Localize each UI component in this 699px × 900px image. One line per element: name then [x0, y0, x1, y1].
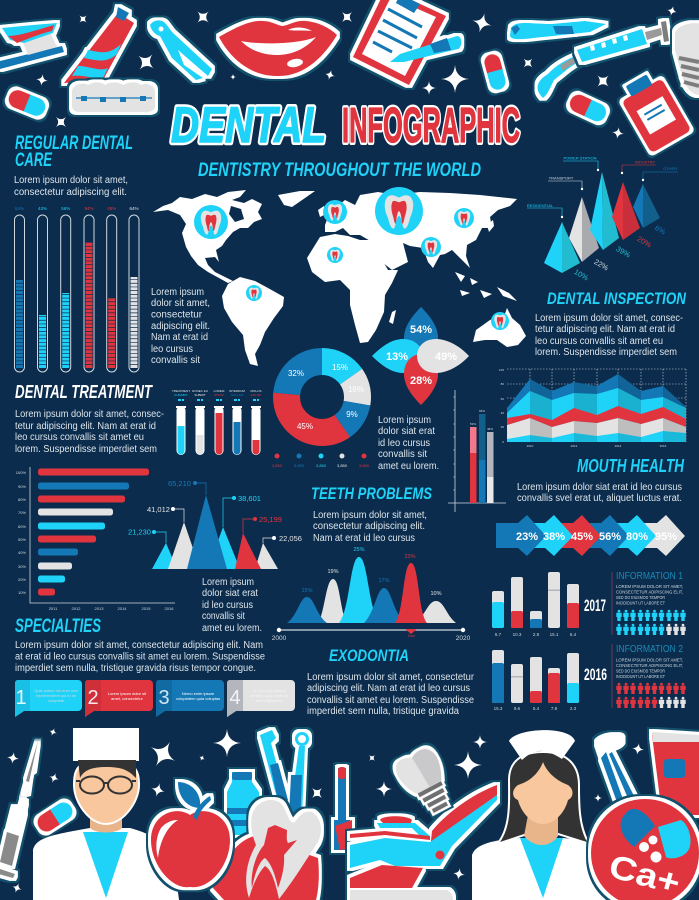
test tubes: INTERDUM — [229, 389, 245, 393]
face — [513, 762, 573, 824]
text block: world map: consectetur — [151, 310, 203, 320]
arrow percentages: 23% — [516, 531, 538, 543]
horizontal bar chart: 20% — [18, 577, 26, 582]
bell curve chart — [272, 547, 471, 642]
text block: dental inspection: tetur adipiscing elit. Nam at erat id — [535, 324, 675, 335]
donut chart: 32% — [288, 369, 304, 378]
text block: lorem. Suspendisse imperdiet sem — [15, 444, 157, 455]
text block: Lorem ipsum dolor sit amet, consectetur adipiscing elit. Nam — [15, 640, 263, 651]
horizontal bar chart: 2016 — [165, 606, 174, 611]
icon: dental implant — [675, 23, 699, 95]
arrow percentages — [496, 515, 685, 556]
card 1: voluptate — [48, 698, 65, 703]
icon: implant bottom — [392, 744, 458, 818]
tube bar chart: 45% — [107, 206, 116, 211]
text block: world map: dolor sit amet, — [151, 298, 210, 309]
scrubs — [520, 838, 563, 898]
icon: syringe bottom left — [0, 741, 38, 878]
text block — [313, 510, 427, 544]
horizontal bar chart: 40% — [18, 550, 26, 555]
petal chart: 13% — [386, 351, 408, 363]
icon: capsule pill top centre — [483, 53, 507, 91]
heading — [15, 133, 133, 171]
test tubes: LOREM — [214, 389, 225, 393]
text block: world map: Nam at erat id — [151, 332, 208, 343]
donut legend — [272, 454, 370, 468]
panel: pyramid chart — [527, 156, 678, 283]
text block: tetur adipiscing elit. Nam at erat id — [15, 421, 156, 432]
heading: CARE — [15, 150, 53, 171]
icon: dental chair — [350, 785, 497, 900]
tube bar chart: 94% — [84, 206, 94, 211]
donut chart — [286, 362, 364, 432]
tube bar chart — [14, 206, 139, 372]
neck — [90, 810, 122, 832]
doctor figure — [33, 728, 179, 900]
icon: calcium pill circle: Ca+ — [605, 847, 684, 900]
horizontal bar chart: 10% — [18, 590, 26, 595]
information 2: LOREM IPSUM DOLOR SIT AMET, — [616, 658, 683, 662]
neck — [524, 815, 558, 845]
hair — [500, 753, 587, 842]
horizontal bar chart: 50% — [18, 537, 26, 542]
panel: regular dental care — [14, 133, 139, 372]
glasses — [76, 776, 136, 794]
bar chart 2016: 2.3 — [570, 706, 577, 711]
bell curve chart: 2020 — [456, 635, 471, 642]
text block — [14, 175, 128, 198]
text block: mountain chart: convallis sit — [202, 611, 245, 622]
bar chart 2017: 6.4 — [570, 632, 577, 637]
card 4: Ut enim ad minima — [252, 688, 286, 693]
text block: Lorem ipsum dolor siat erat id leo cursus — [517, 482, 682, 493]
information 1 — [612, 571, 686, 635]
panel: dental treatment — [15, 382, 262, 455]
bar chart 2016 — [492, 650, 607, 711]
information 2 — [612, 644, 686, 708]
text block: mountain chart: Lorem ipsum — [202, 577, 254, 588]
horizontal bar chart: 30% — [18, 564, 26, 569]
coat — [472, 838, 613, 900]
title word: dental fill weight: DENTAL — [171, 97, 326, 153]
donut legend: 3,850 — [294, 463, 305, 468]
horizontal bar chart: 2012 — [72, 606, 81, 611]
text block: dental inspection: leo cursus convallis sit amet eu — [535, 336, 663, 347]
arrow percentages: 95% — [655, 531, 677, 543]
text block: convallis sit amet eu lorem. Suspendisse — [307, 695, 474, 706]
mountain chart — [128, 479, 302, 569]
donut legend: 3,850 — [359, 463, 370, 468]
mountain chart: 22,056 — [279, 534, 302, 543]
vertical bar chart: 68% — [479, 409, 485, 413]
petal chart: 54% — [410, 324, 432, 336]
heading: REGULAR DENTAL — [15, 133, 133, 154]
information 2: SED DO EIUSMOD TEMPOR — [616, 668, 665, 674]
text block: leo cursus convallis sit amet eu — [15, 432, 144, 443]
bell curve chart: 25% — [353, 547, 365, 553]
text block: world map: convallis sit — [151, 355, 200, 366]
petal chart: 49% — [435, 351, 457, 363]
text block: donut: amet eu lorem. — [378, 461, 439, 472]
area chart: 2012 — [571, 444, 578, 448]
text block: donut: Lorem ipsum — [378, 415, 431, 426]
area chart — [499, 368, 686, 448]
mountain chart: 21,230 — [128, 528, 151, 536]
icon: capsule pill bottom left — [34, 799, 76, 835]
coat — [33, 828, 179, 900]
horizontal bar chart: 2014 — [118, 606, 127, 611]
text block: at erat id leo cursus convallis sit amet eu lorem. Suspendisse — [15, 652, 265, 662]
horizontal bar chart: 2013 — [95, 606, 104, 611]
text block: world map: adipiscing elit. — [151, 321, 210, 332]
hat — [73, 728, 139, 761]
text block: convallis svel erat ut, aliquet luctus erat. — [517, 493, 682, 504]
bar chart 2016: 2016 — [584, 665, 607, 684]
donut legend: 3,850 — [316, 463, 327, 468]
horizontal bar chart: 70% — [18, 510, 26, 515]
card 4: 4 — [229, 687, 241, 709]
information 1: LOREM IPSUM DOLOR SIT AMET, — [616, 584, 683, 589]
information 2: CONSECTETUR ADIPISCING ELIT, — [616, 663, 683, 668]
title word: infographic: INFOGRAPHIC — [342, 99, 520, 153]
icon: capsule pill left — [6, 88, 48, 118]
text block: donut — [378, 415, 439, 472]
text block: dental inspection — [535, 313, 683, 358]
test tubes: TREATMENT — [172, 389, 190, 393]
icon: medicine bottle — [616, 69, 691, 153]
arrow percentages: 80% — [626, 531, 648, 543]
text block — [307, 672, 475, 717]
text block: consectetur adipiscing elit. — [14, 187, 127, 198]
card 3 — [156, 680, 224, 717]
information 1: INFORMATION 1 — [616, 571, 683, 582]
text block: mountain chart: dolor siat erat — [202, 588, 258, 599]
bar chart 2016: 7.8 — [551, 706, 558, 711]
icon: calcium pill circle — [591, 799, 699, 900]
panel: pyramid chart: 39% — [614, 244, 632, 260]
horizontal bar chart: 60% — [18, 524, 26, 529]
bell curve chart: Total — [407, 634, 415, 638]
card 2: 2 — [87, 687, 99, 709]
text block — [15, 640, 265, 674]
bell curve chart: 10% — [430, 591, 442, 597]
card 1 — [15, 680, 82, 717]
tube bar chart: 43% — [38, 206, 47, 211]
icon: dental probes — [597, 735, 636, 807]
horizontal bar chart: 90% — [18, 484, 26, 489]
text block: Lorem ipsum dolor sit amet, — [313, 510, 427, 521]
icon: syringe — [577, 21, 669, 62]
text block — [517, 482, 682, 504]
area chart: 0 — [502, 440, 504, 444]
area chart: 100 — [499, 368, 504, 372]
bar chart 2016: 9.6 — [514, 706, 521, 711]
bar chart 2017: 2.8 — [533, 632, 540, 637]
icon: toothpaste tube — [64, 7, 134, 83]
donut chart: 45% — [297, 422, 313, 431]
icon: capsule pill right — [567, 92, 609, 124]
test tubes: DOLOR — [251, 393, 262, 397]
area chart: 20 — [501, 425, 504, 429]
panel: pyramid chart: INDUSTRY — [635, 160, 656, 164]
icon: toothbrush — [0, 23, 64, 69]
horizontal bar chart: 100% — [16, 470, 26, 475]
text block: adipiscing elit. Nam at erat id leo cursus — [307, 683, 470, 694]
panel: pyramid chart: RESIDENTIAL — [527, 203, 554, 208]
panel: exodontia — [307, 646, 475, 717]
donut chart: 16% — [348, 385, 364, 394]
information 1: CONSECTETUR ADIPISCING ELIT, — [616, 590, 683, 594]
panel: pyramid chart: OTHER — [663, 166, 677, 171]
icon: red gum and tooth section — [213, 800, 321, 900]
text block: imperdiet sem nulla, tristique gravida risus tempor congue. — [15, 663, 256, 674]
petal chart: 28% — [410, 375, 432, 387]
text block: imperdiet sem nulla, tristique gravida — [307, 706, 459, 717]
bell curve chart: 23% — [404, 554, 416, 560]
card 1: 1 — [15, 687, 27, 709]
card 2 — [85, 680, 153, 717]
bell curve chart: 2000 — [272, 635, 287, 642]
card 2: Lorem ipsum dolor sit — [108, 691, 147, 696]
text block: dental inspection: lorem. Suspendisse imperdiet sem — [535, 347, 677, 358]
icon: clipboard with pen — [353, 0, 461, 85]
bar chart 2017: 2017 — [584, 596, 606, 615]
tube bar chart: 56% — [61, 206, 70, 211]
panel: mouth health — [496, 456, 685, 556]
mountain chart: 38,601 — [238, 494, 261, 503]
text block: Nam at erat id leo cursus — [313, 533, 415, 544]
horizontal bar chart: 2015 — [142, 606, 151, 611]
panel: teeth problems — [272, 484, 471, 642]
panel: specialties — [15, 616, 295, 717]
test tubes: DONEC EU — [192, 389, 208, 393]
heading: TEETH PROBLEMS — [311, 484, 433, 503]
information 2: INCIDIDUNT UT LABORE ET — [616, 674, 665, 679]
card 3: Nemo enim ipsam — [182, 691, 215, 696]
bar chart 2016: 5.4 — [533, 706, 540, 711]
card 3: 3 — [158, 687, 170, 709]
donut chart: 15% — [332, 363, 348, 372]
text block: Lorem ipsum dolor sit amet, consectetur — [307, 672, 475, 683]
icon: electric toothbrush — [334, 767, 352, 850]
area chart: 2014 — [615, 444, 622, 448]
icon: water bottle — [227, 772, 259, 835]
horizontal bar chart: 80% — [18, 497, 26, 502]
test tubes — [172, 389, 262, 455]
text block — [15, 409, 164, 455]
card 1: Quis autem vel eum iure — [34, 688, 78, 693]
text block: mountain chart — [202, 577, 262, 634]
heading: EXODONTIA — [329, 646, 409, 665]
panel: pyramid chart: POWER STATION — [564, 156, 597, 160]
title word: dental: DENTAL — [171, 97, 326, 153]
information 2: INFORMATION 2 — [616, 644, 683, 655]
card 4: veniam, quis nostrum — [250, 693, 289, 698]
horizontal bar chart: 2011 — [49, 606, 58, 611]
text block: Lorem ipsum dolor sit amet, — [14, 175, 128, 186]
map tooth markers — [194, 187, 509, 330]
bar chart 2017 — [492, 572, 606, 637]
area chart: 60 — [501, 397, 504, 401]
text block: world map: Lorem ipsum — [151, 287, 204, 298]
arrow percentages: 38% — [543, 531, 565, 543]
bar chart 2017: 10.3 — [513, 632, 522, 637]
donut legend: 3,850 — [272, 463, 283, 468]
icon: dental handpiece — [510, 21, 606, 39]
icon: apple — [151, 782, 230, 887]
information 1: SED DO EIUSMOD TEMPOR — [616, 595, 665, 600]
area chart: 80 — [501, 382, 504, 386]
vertical bar chart: 48% — [487, 427, 493, 431]
bell curve chart: 19% — [327, 569, 339, 575]
test tubes: MOLLIS — [250, 389, 262, 393]
test tubes: IPSUM — [214, 393, 224, 397]
face — [75, 760, 138, 823]
horizontal bar chart — [16, 467, 175, 611]
text block: donut: convallis sit — [378, 449, 427, 460]
test tubes: NULLAM — [231, 393, 244, 397]
donut chart: 9% — [346, 410, 358, 419]
scrubs — [83, 832, 128, 898]
area chart: 40 — [501, 411, 504, 415]
icon: lips — [219, 21, 337, 76]
hair — [78, 760, 136, 778]
mountain chart: 25,199 — [259, 515, 282, 524]
test tubes: CURABIT. — [174, 393, 188, 397]
arrow percentages: 56% — [599, 531, 621, 543]
panel: pyramid chart: TRANSPORT — [549, 176, 574, 180]
information 1: INCIDIDUNT UT LABORE ET — [616, 600, 665, 606]
petal chart — [372, 307, 469, 405]
nurse cap — [509, 730, 575, 760]
text block: mountain chart: amet eu lorem. — [202, 623, 262, 634]
icon: braces — [72, 82, 155, 112]
icon: curved dental tool — [538, 54, 582, 98]
arrow percentages: 45% — [571, 531, 593, 543]
card 4: exercitationem — [256, 698, 283, 703]
heading: SPECIALTIES — [15, 616, 101, 637]
nurse figure — [472, 730, 613, 900]
bar chart 2016: 15.3 — [494, 706, 503, 711]
vertical bar chart: 53% — [470, 422, 476, 426]
area chart: 2016 — [660, 444, 667, 448]
bar chart 2017: 15.1 — [550, 632, 559, 637]
world map — [153, 190, 526, 366]
panel: pyramid chart: 22% — [592, 257, 610, 273]
text block: world map: leo cursus — [151, 344, 193, 355]
panel: pyramid chart: 10% — [572, 267, 590, 283]
bar chart 2017: 5.7 — [495, 632, 502, 637]
tube bar chart: 64% — [15, 206, 24, 211]
panel: pyramid chart: 6% — [653, 223, 667, 237]
icon: paste tube right — [652, 732, 699, 815]
text block: donut: dolor siat erat — [378, 426, 435, 437]
text block: dental inspection: Lorem ipsum dolor sit amet, consec- — [535, 313, 683, 324]
text block: mountain chart: id leo cursus — [202, 600, 253, 611]
title — [171, 97, 520, 153]
donut legend: 3,850 — [337, 463, 348, 468]
tube bar chart: 64% — [129, 206, 139, 211]
card 2: amet, consectetur — [111, 696, 144, 701]
bell curve chart: 15% — [301, 588, 313, 594]
test tubes: SUBMIT — [194, 393, 206, 397]
bell curve chart: 17% — [378, 578, 390, 584]
icon: dental pliers — [150, 20, 212, 80]
mountain chart: 65,210 — [168, 479, 191, 488]
card 1: reprehenderit qui in ea — [36, 693, 77, 698]
vertical bar chart — [448, 390, 506, 512]
heading: DENTAL TREATMENT — [15, 382, 153, 402]
text block: Lorem ipsum dolor sit amet, consec- — [15, 409, 164, 420]
icon: dental tools — [260, 730, 309, 825]
area chart: 2010 — [527, 444, 534, 448]
title word: infographic fill weight: INFOGRAPHIC — [342, 99, 520, 153]
panel: pyramid chart: 20% — [635, 234, 653, 250]
text block: world map — [151, 287, 210, 366]
card 4 — [227, 680, 295, 717]
text block: donut: id leo cursus — [378, 438, 430, 449]
text block: consectetur adipiscing elit. — [313, 521, 425, 532]
heading: dentistry throughout the world: DENTISTRY THROUGHOUT THE WORLD — [198, 160, 481, 181]
card 3: voluptatem quia voluptas — [176, 696, 220, 701]
mountain chart: 41,012 — [147, 505, 170, 514]
